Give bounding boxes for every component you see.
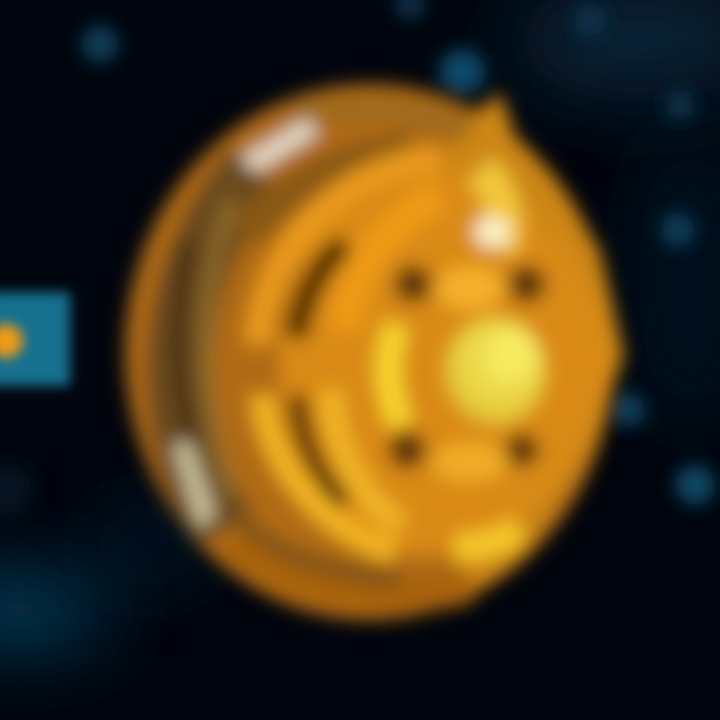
dark grooves	[298, 250, 340, 498]
top bright spot	[474, 216, 510, 248]
icon: left blue square with orange dot	[0, 292, 70, 386]
bolt holes	[388, 265, 546, 469]
golden ring arcs	[258, 158, 520, 552]
stars: blurred blue dots	[81, 0, 715, 505]
shaded rim bands	[179, 109, 470, 594]
upper pad	[436, 266, 504, 310]
lower pad	[432, 442, 508, 482]
rim highlights	[172, 118, 318, 530]
golden disc	[125, 84, 624, 620]
outer rim	[125, 84, 624, 620]
inner disc	[280, 168, 610, 555]
central hub	[445, 318, 545, 426]
